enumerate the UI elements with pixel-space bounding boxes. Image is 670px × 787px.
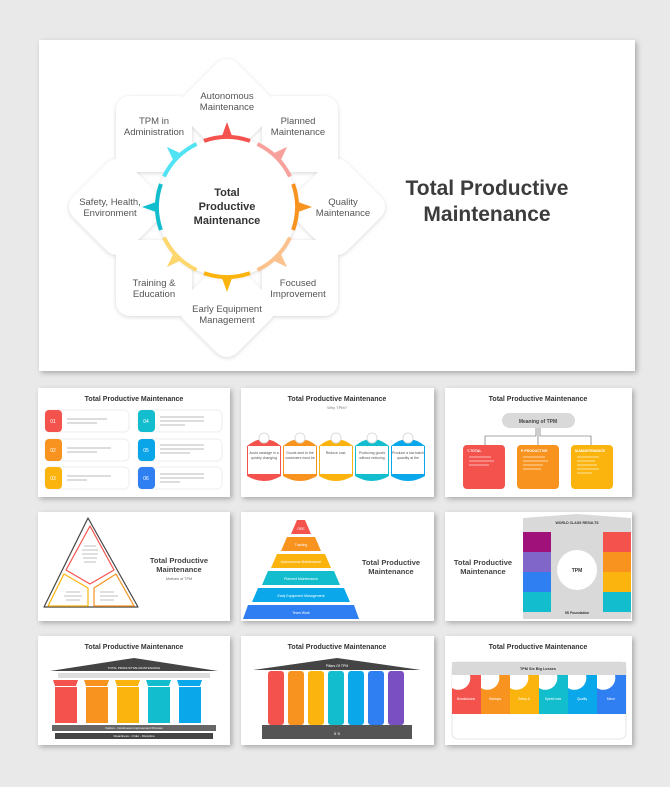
- thumb 5: pyramid: Early Equipment Management: [277, 594, 325, 598]
- thumb 2: why TPM: [241, 388, 434, 497]
- title: Maintenance: [423, 203, 551, 226]
- thumb 2: why TPM: Total Productive Maintenance: [288, 396, 386, 403]
- labels: Environment: [83, 208, 137, 219]
- thumb 8: pillars of TPM: [241, 636, 434, 745]
- center label: Productive: [199, 201, 255, 213]
- thumb 5: pyramid: Autonomous Maintenance: [281, 560, 321, 564]
- labels: Focused: [280, 278, 316, 289]
- thumb 7: pillars house: Kaizen - Continuous Improvement Process: [105, 726, 163, 730]
- thumb 8: pillars of TPM: Pillars Of TPM: [326, 664, 348, 668]
- thumb 1: six points: 01: [50, 419, 56, 425]
- tiles: [63, 53, 391, 363]
- thumb 9: six big losses: Total Productive Maintenance: [489, 644, 587, 651]
- thumb 3: meaning of TPM: [445, 388, 632, 497]
- thumb 8: pillars of TPM: Total Productive Maintenance: [288, 644, 386, 651]
- thumb 6: TPM world class: TPM: [572, 568, 582, 574]
- arcs: [142, 122, 312, 292]
- thumb 2: why TPM: Produce a low batch: [392, 451, 424, 455]
- labels: Administration: [124, 127, 184, 138]
- thumb 8: pillars of TPM: 5 S: [334, 731, 340, 736]
- title: [406, 177, 568, 226]
- labels: TPM in: [139, 116, 169, 127]
- labels: Maintenance: [271, 127, 325, 138]
- thumb 9: six big losses: Breakdowns: [457, 697, 475, 701]
- thumb 4: motives of TPM: Total Productive: [150, 556, 208, 565]
- labels: Improvement: [270, 289, 326, 300]
- thumb 9: six big losses: Startups: [489, 697, 501, 701]
- thumb 3: meaning of TPM: M-MAINTENANCE: [575, 449, 606, 453]
- center label: Total: [214, 187, 240, 199]
- thumb 6: TPM world class: [445, 512, 632, 621]
- thumb 4: motives of TPM: Motives of TPM: [166, 577, 192, 581]
- thumb 2: why TPM: Why TPM?: [327, 405, 348, 410]
- thumb 1: six points: 05: [143, 448, 149, 454]
- thumb 7: pillars house: TOTAL PRODUCTIVE MAINTENANCE: [108, 666, 160, 670]
- thumb 7: pillars house: Total Productive Maintenance: [85, 644, 183, 651]
- labels: Education: [133, 289, 175, 300]
- thumb 2: why TPM: quantity at the: [397, 456, 419, 460]
- thumb 2: why TPM: Producing goods: [359, 451, 385, 455]
- thumb 2: why TPM: customers must be: [285, 456, 315, 460]
- thumb 6: TPM world class: Total Productive: [454, 558, 512, 567]
- thumb 6: TPM world class: Maintenance: [460, 567, 506, 576]
- thumb 9: six big losses: Speed loss: [545, 697, 562, 701]
- labels: Safety, Health,: [79, 197, 141, 208]
- thumb 7: pillars house: Cleanliness - Order - Discipline: [113, 734, 155, 738]
- title: Total Productive: [406, 177, 568, 200]
- thumb 3: meaning of TPM: Total Productive Maintenance: [489, 396, 587, 403]
- thumb 1: six points: 06: [143, 476, 149, 482]
- thumb 2: why TPM: without reducing: [359, 456, 385, 460]
- labels: Management: [199, 315, 255, 326]
- thumb 1: six points: 02: [50, 448, 56, 454]
- thumb 9: six big losses: Quality: [577, 697, 587, 701]
- center circle: [157, 137, 297, 277]
- thumb 1: six points: 04: [143, 419, 149, 425]
- main slide: [39, 40, 635, 371]
- thumb 2: why TPM: Reduce cost.: [326, 451, 346, 455]
- thumb 3: meaning of TPM: Meaning of TPM: [519, 419, 557, 425]
- thumb 1: six points: Total Productive Maintenance: [85, 396, 183, 403]
- thumb 2: why TPM: Goods sent to the: [286, 451, 314, 455]
- thumb 9: six big losses: Minor: [607, 697, 616, 701]
- thumb 5: pyramid: [241, 512, 434, 621]
- center label: Maintenance: [194, 215, 260, 227]
- thumb 5: pyramid: Total Productive: [362, 558, 420, 567]
- thumb 5: pyramid: Team Work: [292, 611, 310, 615]
- thumb 5: pyramid: OEE: [297, 527, 305, 531]
- labels: [79, 91, 370, 326]
- labels: Early Equipment: [192, 304, 262, 315]
- thumb 5: pyramid: Planned Maintenance: [284, 577, 318, 581]
- thumb 4: motives of TPM: Maintenance: [156, 565, 202, 574]
- thumb 7: pillars house: [38, 636, 230, 745]
- thumb 9: six big losses: Setup &: [518, 697, 531, 701]
- thumb 9: six big losses: [445, 636, 632, 745]
- thumb 5: pyramid: Training: [295, 543, 307, 547]
- labels: Training &: [133, 278, 176, 289]
- thumb 9: six big losses: TPM Six Big Losses: [520, 667, 556, 671]
- thumb 3: meaning of TPM: T-TOTAL: [467, 449, 482, 453]
- thumb 5: pyramid: Maintenance: [368, 567, 414, 576]
- thumb 1: six points: 03: [50, 476, 56, 482]
- thumb 2: why TPM: quickly changing: [251, 456, 277, 460]
- center label: [194, 187, 260, 227]
- thumb 4: motives of TPM: [38, 512, 230, 621]
- labels: Quality: [328, 197, 358, 208]
- labels: Planned: [281, 116, 315, 127]
- thumb 3: meaning of TPM: P-PRODUCTIVE: [521, 449, 548, 453]
- labels: Maintenance: [200, 102, 254, 113]
- labels: Autonomous: [200, 91, 254, 102]
- thumb 1: six points: [38, 388, 230, 497]
- labels: Maintenance: [316, 208, 370, 219]
- thumb 2: why TPM: Avoid wastage in a: [249, 451, 279, 455]
- thumb 6: TPM world class: WORLD CLASS RESULTS: [555, 521, 599, 525]
- thumb 6: TPM world class: 5S Foundation: [565, 611, 589, 615]
